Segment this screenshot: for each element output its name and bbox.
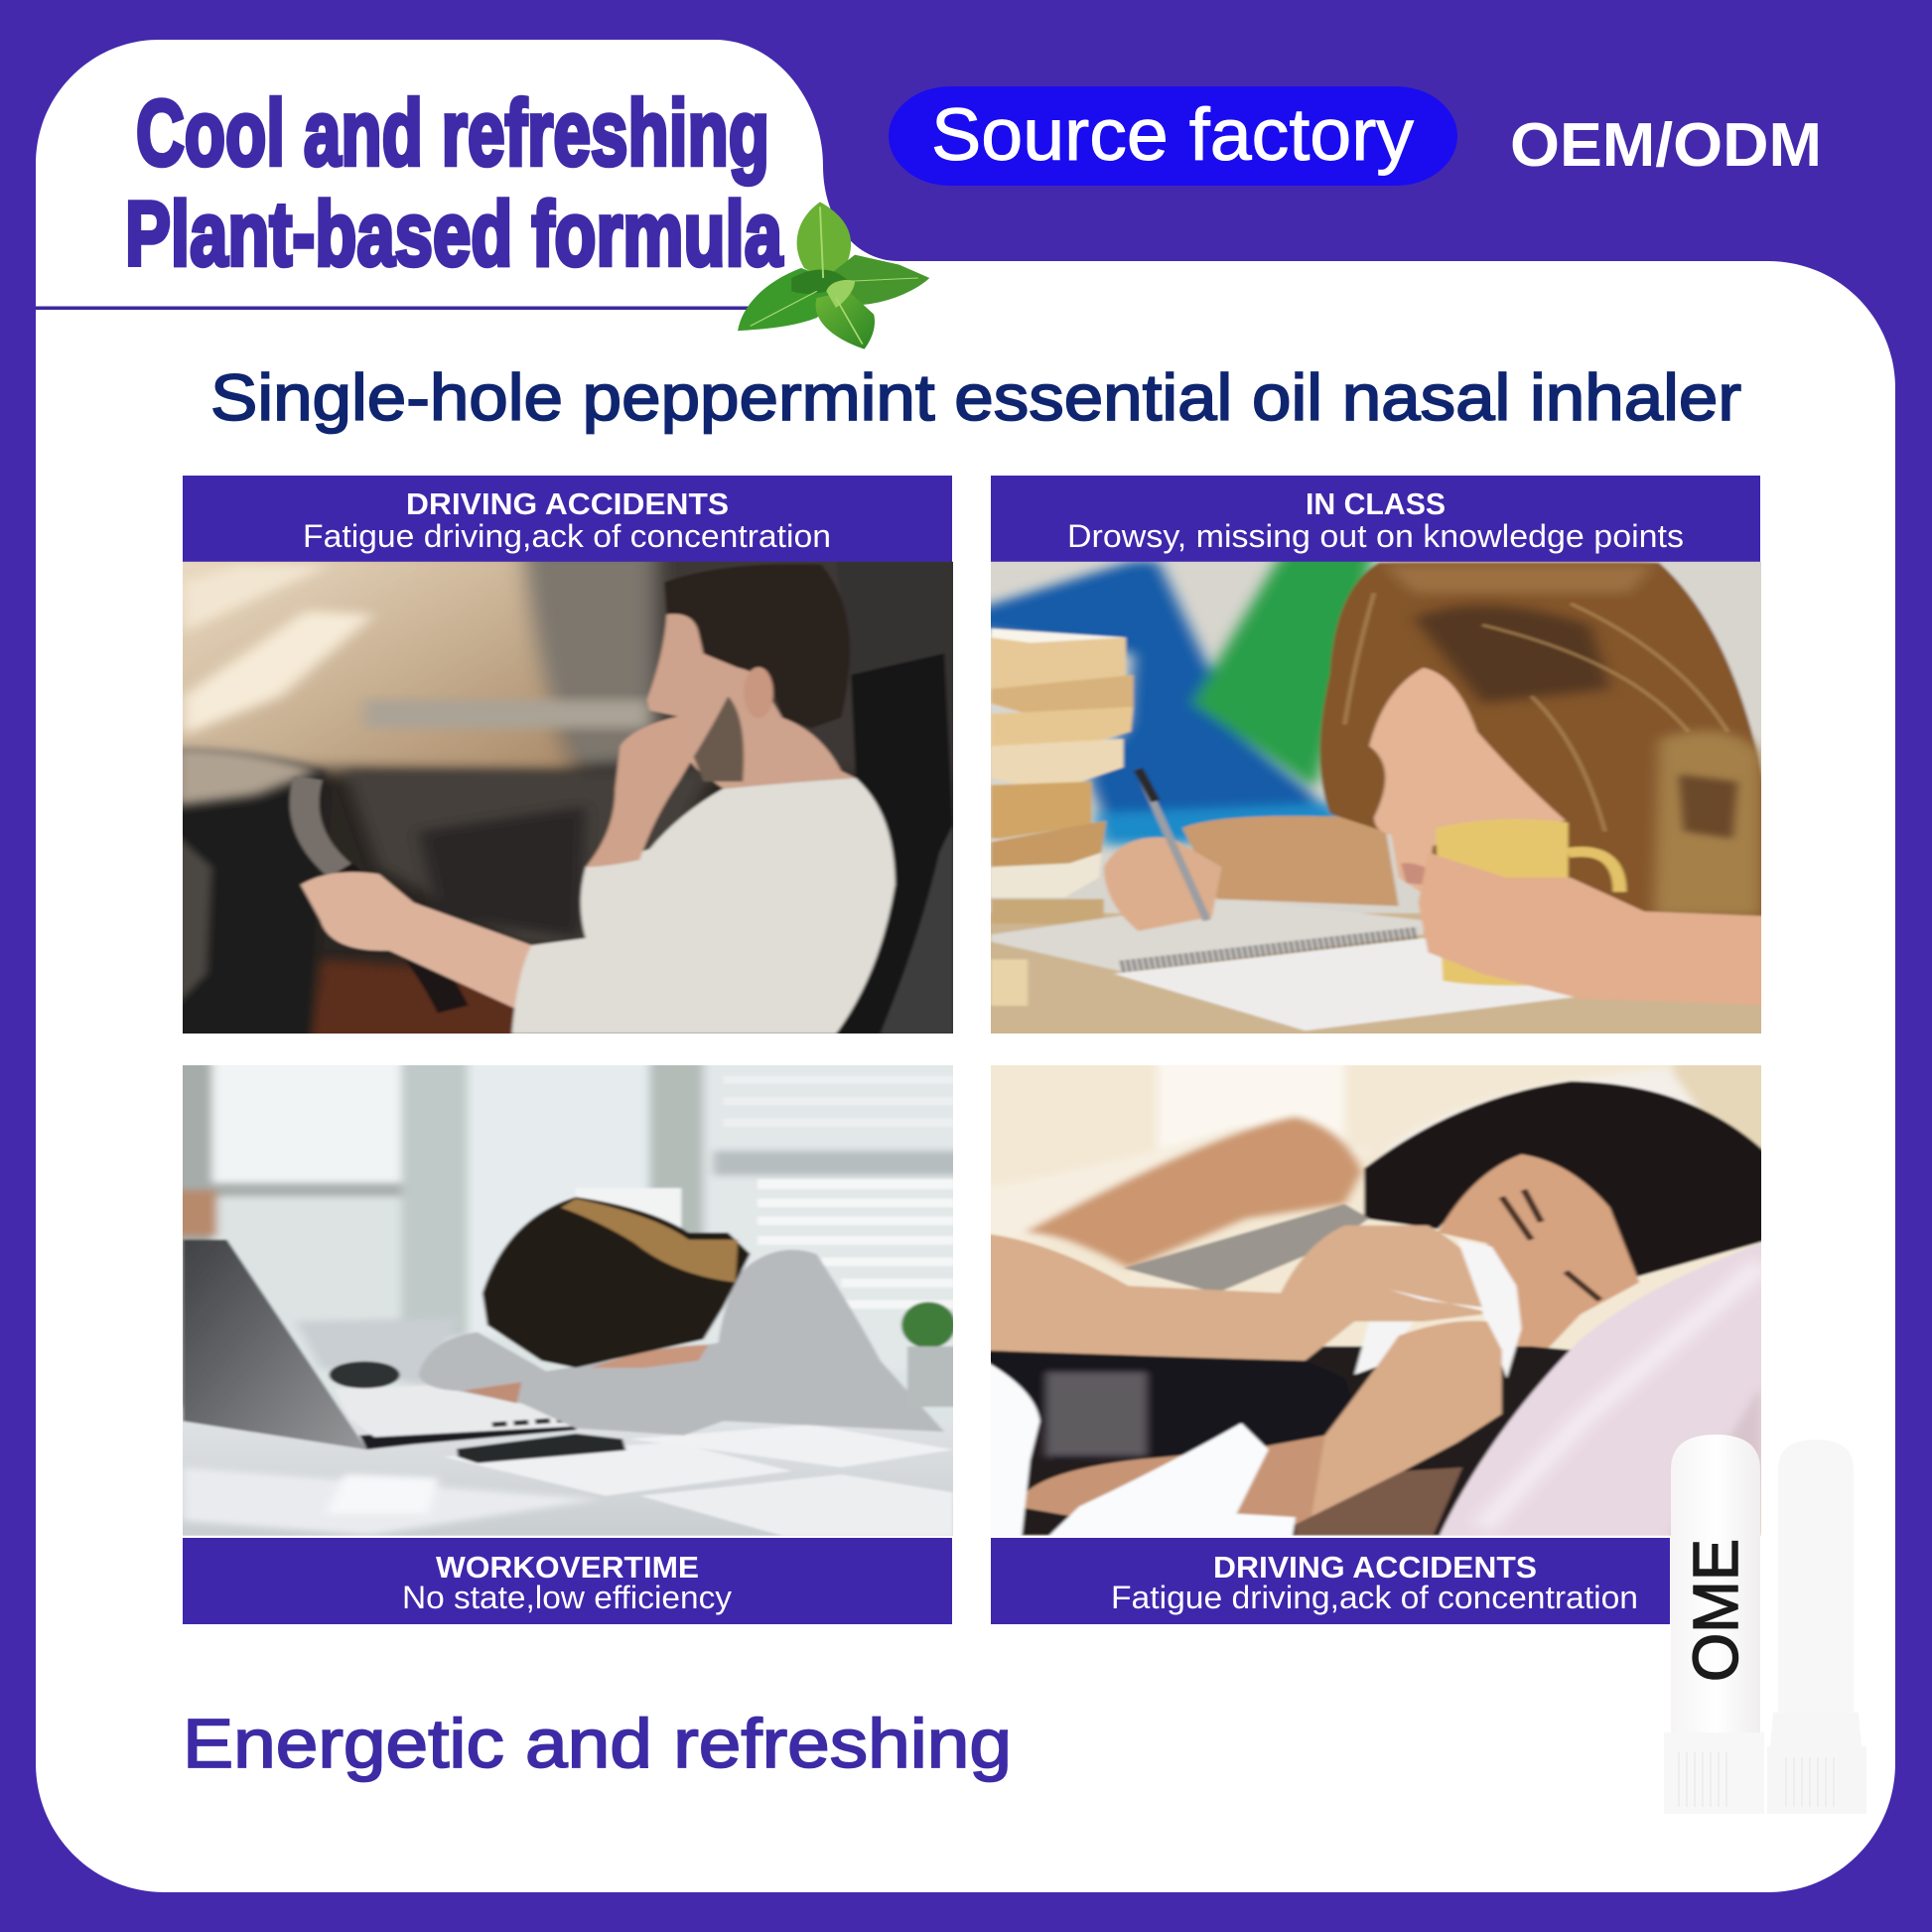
title: Plant-based formula bbox=[125, 184, 783, 285]
panel header band bbox=[183, 476, 952, 562]
photo: office worker asleep on laptop bbox=[183, 1065, 953, 1536]
product heading: Single-hole peppermint essential oil nasal inhaler bbox=[210, 360, 1741, 434]
panel header band: DRIVING ACCIDENTS bbox=[406, 486, 729, 521]
title: Cool and refreshing bbox=[136, 80, 769, 185]
photo: student asleep at desk bbox=[991, 562, 1761, 1034]
panel: work overtime bbox=[163, 1051, 979, 1624]
panel header band: Fatigue driving,ack of concentration bbox=[303, 518, 831, 554]
panel footer band: DRIVING ACCIDENTS bbox=[1213, 1550, 1537, 1585]
panel footer band bbox=[991, 1538, 1670, 1624]
inhaler inner stick bbox=[1767, 1440, 1866, 1814]
icon: mint leaves bbox=[738, 202, 929, 349]
inhaler tube with OME logo: OME bbox=[1680, 1539, 1751, 1682]
panel: driving accidents bbox=[153, 476, 974, 1052]
photo: yawning driver bbox=[183, 562, 953, 1034]
tagline: Energetic and refreshing bbox=[183, 1705, 1012, 1782]
badge: source factory: Source factory bbox=[931, 93, 1414, 176]
panel header band: IN CLASS bbox=[1306, 486, 1446, 521]
title bbox=[125, 80, 783, 285]
panel footer band: Fatigue driving,ack of concentration bbox=[1111, 1580, 1638, 1615]
panel footer band bbox=[183, 1538, 952, 1624]
panel header band: Drowsy, missing out on knowledge points bbox=[1067, 518, 1684, 554]
panel: driving accidents (sick in bed) bbox=[971, 1051, 1782, 1624]
panel header band bbox=[991, 476, 1760, 562]
label: OEM/ODM: OEM/ODM bbox=[1510, 111, 1822, 180]
photo: woman with tissue in bed bbox=[991, 1065, 1761, 1536]
panel footer band: No state,low efficiency bbox=[402, 1580, 733, 1615]
product: nasal inhaler with cap bbox=[1664, 1435, 1866, 1814]
inhaler tube with OME logo bbox=[1664, 1435, 1764, 1814]
panel footer band: WORKOVERTIME bbox=[436, 1550, 699, 1585]
panel: in class bbox=[971, 476, 1782, 1052]
tab divider line bbox=[36, 306, 770, 310]
badge: source factory bbox=[889, 86, 1457, 186]
